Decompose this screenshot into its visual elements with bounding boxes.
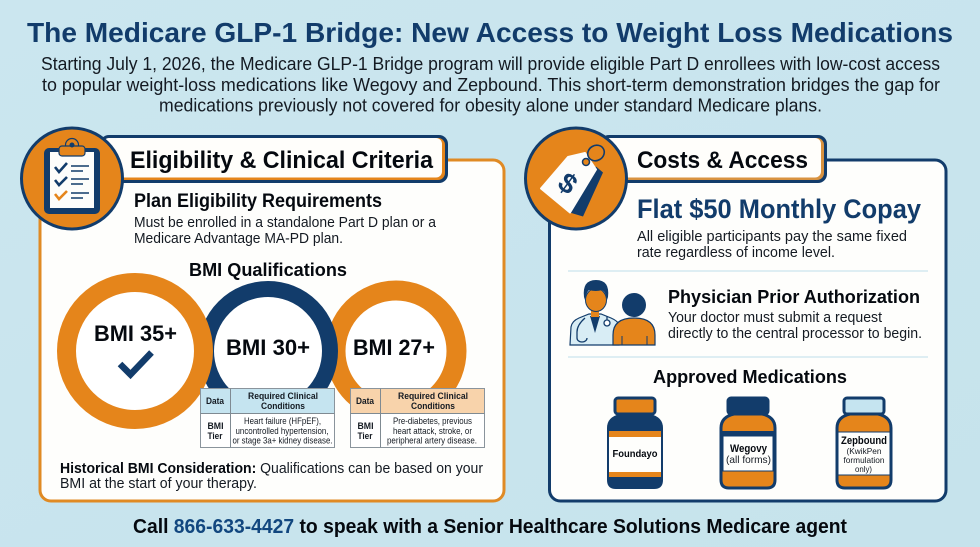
prior authorization text: directly to the central processor to begin. [668,326,922,342]
table: BMI 30+ conditions: Required Clinical [248,391,318,402]
icon: doctor and patient [570,280,655,345]
icon: clipboard checklist [22,128,122,229]
ring: BMI 30+ [206,289,330,413]
heading: BMI qualifications: BMI Qualifications [189,259,347,280]
bottle: Zepbound: (KwikPen [846,446,882,456]
table: BMI 27+ conditions: peripheral artery disease. [387,436,477,446]
table: BMI 30+ conditions: or stage 3a+ kidney disease. [232,436,332,446]
heading banner: eligibility: Eligibility & Clinical Criteria [130,147,434,174]
title: The Medicare GLP-1 Bridge: New Access to Weight Loss Medications [27,17,953,48]
prior authorization text [668,286,922,342]
intro text: to popular weight-loss medications like Wegovy and Zepbound. This short-term demonstration bridges the gap for [42,75,940,95]
table: BMI 30+ conditions: Conditions [261,401,305,412]
intro text [41,54,940,116]
intro text: Starting July 1, 2026, the Medicare GLP-1 Bridge program will provide eligible Part D enrollees with low-cost access [41,54,940,74]
table: BMI 27+ conditions: BMI [358,421,374,432]
bottle: Zepbound: formulation [844,455,885,465]
table: BMI 30+ conditions [200,388,334,448]
ring: BMI 35+: BMI 35+ [94,321,177,346]
table: BMI 27+ conditions: Pre-diabetes, previous [393,416,472,427]
icon: price tag: $ [552,166,583,201]
heading banner: costs [600,135,827,183]
ring: BMI 35+ [66,282,204,420]
historical BMI note [60,461,483,492]
panel: costs and access [526,128,946,501]
plan eligibility text: Medicare Advantage MA-PD plan. [134,231,343,247]
ring: BMI 30+: BMI 30+ [226,335,310,360]
bottle: Foundayo [607,398,663,489]
plan eligibility text: Must be enrolled in a standalone Part D plan or a [134,215,437,231]
table: BMI 27+ conditions: Conditions [411,401,455,412]
ring: BMI 27+: BMI 27+ [353,335,435,360]
table: BMI 30+ conditions: Heart failure (HFpEF), [244,416,321,427]
historical BMI note: BMI at the start of your therapy. [60,476,257,492]
table: BMI 30+ conditions: uncontrolled hypertension, [236,426,328,437]
historical BMI note: Historical BMI Consideration: Qualifications can be based on your [60,461,483,477]
table: BMI 27+ conditions [350,388,484,448]
bottle: Wegovy: Wegovy [730,443,768,455]
heading: approved medications: Approved Medications [653,366,847,387]
ring: BMI 27+ [336,290,456,412]
icon: price tag [526,128,626,229]
bottle: Foundayo: Foundayo [612,448,658,460]
prior authorization text: Physician Prior Authorization [668,286,920,307]
flat copay block: rate regardless of income level. [637,245,835,261]
flat copay block [637,194,921,261]
bottle: Wegovy [721,398,775,488]
table: BMI 27+ conditions: heart attack, stroke, or [393,426,472,437]
flat copay block: All eligible participants pay the same fixed [637,229,907,245]
flat copay block: Flat $50 Monthly Copay [637,194,921,224]
heading banner: costs: Costs & Access [637,147,808,174]
intro text: medications previously not covered for obesity alone under standard Medicare plans. [159,96,822,116]
footer call to action: Call 866-633-4427 to speak with a Senior Healthcare Solutions Medicare agent [133,516,847,538]
bottle: Wegovy: (all forms) [726,454,771,466]
table: BMI 27+ conditions: Data [356,396,375,407]
icon: check mark [120,352,152,374]
table: BMI 27+ conditions: Tier [358,431,373,442]
prior authorization text: Your doctor must submit a request [668,310,882,326]
heading banner: eligibility [100,135,448,183]
bottle: Zepbound: only) [855,464,872,474]
plan eligibility text: Plan Eligibility Requirements [134,191,382,212]
table: BMI 30+ conditions: BMI [208,421,224,432]
table: BMI 27+ conditions: Required Clinical [398,391,468,402]
bottle: Zepbound: Zepbound [841,435,887,447]
table: BMI 30+ conditions: Data [206,396,225,407]
table: BMI 30+ conditions: Tier [208,431,223,442]
plan eligibility text [134,191,437,247]
bottle: Zepbound [837,398,891,488]
panel: eligibility and clinical criteria [22,128,504,501]
